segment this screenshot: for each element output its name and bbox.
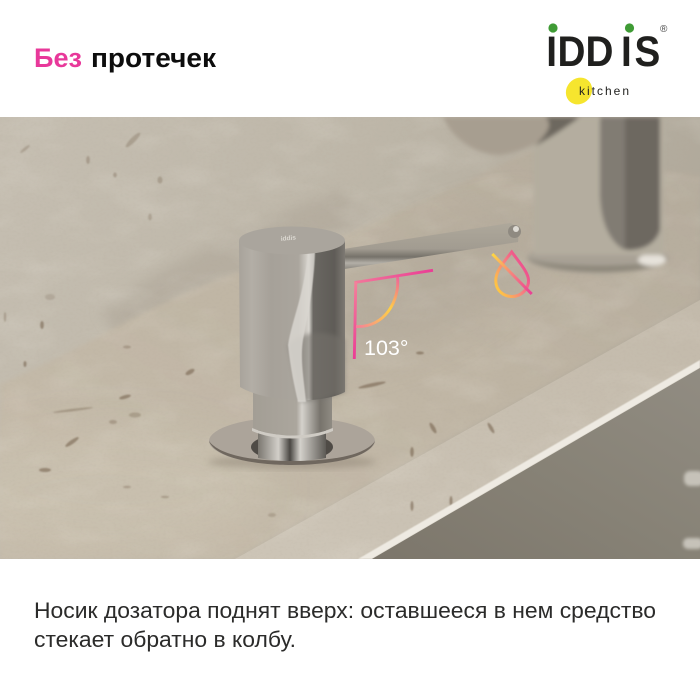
stone wall — [0, 117, 700, 559]
angle arc — [356, 277, 398, 327]
angle marker 103 degrees — [354, 270, 433, 359]
logo green dots — [548, 23, 634, 33]
description line 2: стекает обратно в колбу. — [34, 627, 296, 652]
soap dispenser — [208, 223, 521, 469]
logo kitchen label: kitchen — [579, 84, 629, 98]
title accent word: Без — [34, 43, 82, 73]
title — [34, 43, 216, 73]
dispenser shadow — [208, 455, 376, 469]
photo: dispenser on stone counter — [0, 117, 700, 559]
drop slash — [492, 254, 532, 294]
faucet handle — [444, 117, 549, 156]
counter top — [119, 270, 696, 522]
logo registered mark: ® — [660, 24, 668, 35]
angle vertical arm — [354, 282, 356, 359]
dispenser body — [239, 241, 345, 400]
logo yellow spot — [560, 72, 598, 110]
counter soft shade — [350, 284, 438, 333]
drop outline — [496, 252, 529, 296]
faucet column — [536, 147, 660, 254]
title main word: протечек — [91, 43, 216, 73]
logo wordmark: IDDIS — [546, 27, 660, 75]
sink reflection — [683, 471, 700, 549]
faucet in background — [443, 117, 669, 273]
upper neck — [253, 390, 332, 436]
description text — [34, 598, 656, 652]
spout — [337, 223, 518, 270]
angle horizontal arm — [354, 270, 433, 282]
stone pits — [4, 131, 496, 517]
counter front edge — [235, 300, 700, 559]
faucet band light side — [600, 117, 625, 250]
body lower light wedge — [288, 333, 345, 402]
stone mottling — [115, 120, 700, 392]
description line 1: Носик дозатора поднят вверх: оставшееся в нем средство — [34, 598, 656, 623]
neck ring — [252, 428, 333, 438]
spout tip — [508, 225, 521, 238]
wall shade near counter — [108, 198, 355, 326]
flange rim — [209, 441, 375, 465]
cap engraving: iddis — [280, 234, 297, 243]
lower neck — [258, 428, 326, 461]
faucet handle edge — [535, 117, 580, 146]
counter front light area — [0, 430, 270, 550]
body reflection — [288, 252, 315, 402]
logo: IDDIS kitchen — [546, 23, 668, 110]
faucet dark band — [622, 117, 662, 252]
sink white rim — [358, 360, 700, 559]
icon: no-drip drop — [492, 252, 532, 296]
spout tip highlight — [513, 226, 519, 232]
stainless steel sink — [372, 368, 700, 559]
dispenser flange — [209, 420, 375, 460]
faucet base shadow — [532, 260, 648, 274]
angle value: 103° — [364, 336, 408, 360]
flange well — [251, 433, 333, 461]
stone grain — [0, 117, 700, 559]
faucet base — [528, 254, 666, 266]
faucet base highlight — [638, 254, 666, 266]
dispenser cap — [239, 226, 345, 254]
